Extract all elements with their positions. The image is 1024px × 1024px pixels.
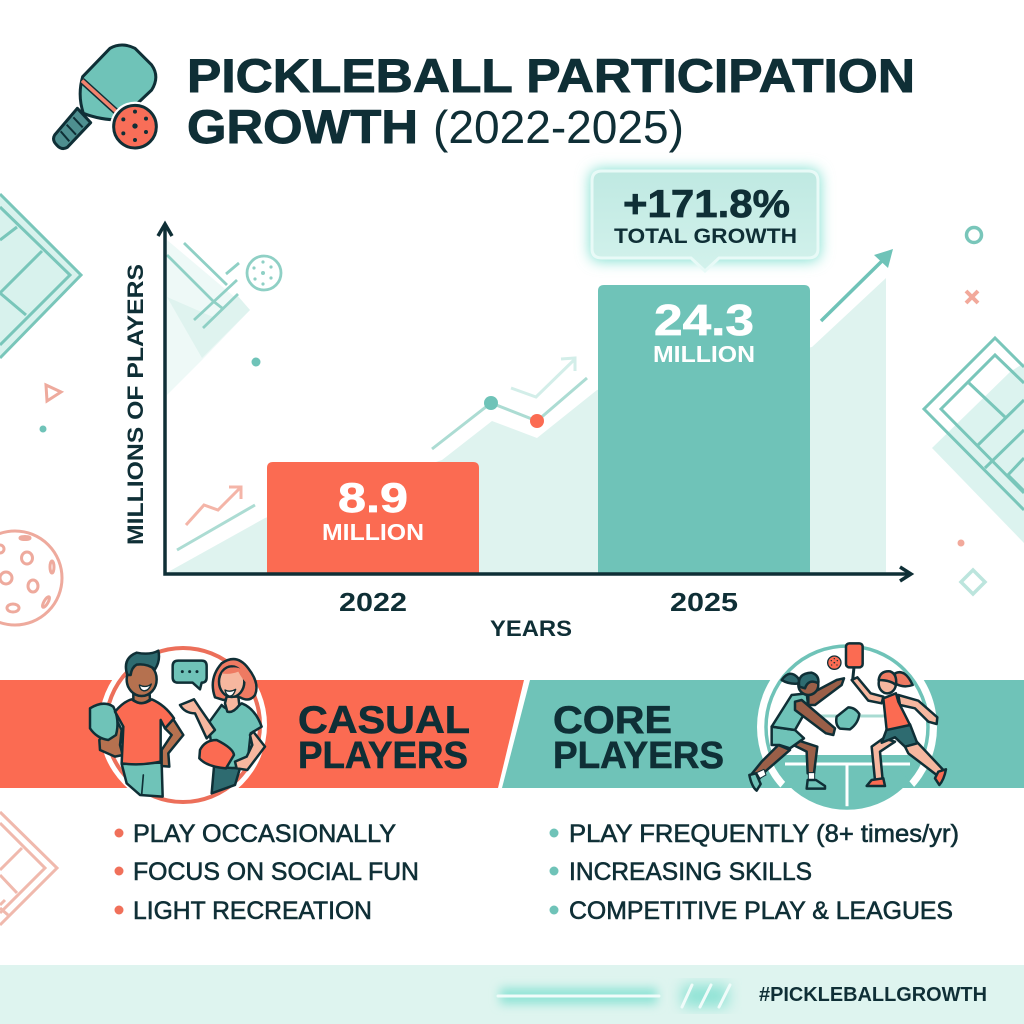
list: core player traits: COMPETITIVE PLAY & LEAGUES: [569, 897, 953, 925]
banner: core players: [502, 680, 1024, 788]
woman: pants: [212, 767, 240, 793]
illustration: core players in competitive rally: [749, 637, 946, 820]
banner: casual players: CASUAL: [298, 699, 470, 742]
list: core player traits: PLAY FREQUENTLY (8+ times/yr): [569, 820, 959, 848]
list: casual player traits: FOCUS ON SOCIAL FUN: [133, 858, 419, 886]
right player: head and ponytail: [895, 672, 913, 686]
decoration: lower left coral court: [0, 812, 57, 925]
left player: head and ponytail: [782, 674, 800, 684]
x axis title: YEARS: [490, 616, 572, 641]
left player: top: [772, 693, 808, 730]
bar: 2025: MILLION: [653, 341, 755, 367]
bar: 2022: MILLION: [322, 519, 424, 545]
illustration: casual players chatting: [90, 641, 267, 809]
callout: total growth: [590, 169, 820, 271]
left player: paddle: [836, 707, 859, 729]
ball: [828, 656, 841, 669]
decoration: right cross: [966, 291, 978, 303]
callout: total growth: TOTAL GROWTH: [614, 225, 797, 248]
decoration: right coral dot: [958, 540, 964, 546]
speech bubble: [173, 661, 207, 689]
x axis label 2025: 2025: [670, 587, 738, 617]
woman: lower arm: [235, 732, 265, 770]
man: near arm: [162, 719, 183, 767]
list: casual player traits: PLAY OCCASIONALLY: [133, 820, 396, 848]
banner: core players: CORE: [553, 699, 672, 742]
decoration: left triangle: [46, 385, 61, 401]
title: [187, 49, 915, 153]
title: (2022-2025): [433, 101, 684, 153]
woman: raised arm and hand: [180, 699, 215, 738]
right player: arms: [852, 677, 883, 703]
decoration: right diamond: [961, 570, 985, 594]
y axis label: MILLIONS OF PLAYERS: [123, 264, 148, 545]
right player: legs: [872, 738, 895, 780]
right player: shorts: [882, 724, 917, 747]
left player: legs: [752, 745, 790, 780]
icon: pickleball paddle and ball: [54, 45, 160, 152]
left player: shorts: [772, 727, 804, 748]
woman: paddle: [199, 740, 234, 768]
arrow: growth arrow next to 2025 bar: [821, 249, 893, 321]
decoration: right court: [924, 338, 1024, 543]
woman: hair back: [213, 659, 256, 700]
chart background: rising light area: [167, 240, 886, 574]
chart decoration: small rising arrows: [177, 487, 255, 550]
banner: casual players: PLAYERS: [298, 735, 468, 777]
x axis label 2022: 2022: [339, 587, 407, 617]
list: core player traits: [550, 820, 959, 925]
bar: 2022: 8.9: [338, 474, 408, 521]
footer band: [0, 965, 1024, 1024]
footer band: #PICKLEBALLGROWTH: [759, 984, 987, 1006]
bar: 2025: [598, 285, 810, 574]
list: casual player traits: [114, 820, 419, 925]
bar: 2025: 24.3: [654, 296, 754, 345]
man: neck and head: [133, 690, 150, 703]
chart decoration: trend line with dots: [432, 358, 587, 449]
right player: top: [883, 693, 910, 730]
title: GROWTH: [187, 100, 418, 153]
chart axes: [158, 224, 911, 581]
banner: casual players: [0, 680, 524, 788]
man: far arm: [99, 720, 123, 757]
man: shirt: [115, 699, 174, 764]
left player: arms: [808, 678, 844, 705]
chart decoration: teal dot: [252, 358, 260, 366]
decoration: right ring: [966, 228, 982, 242]
title: PICKLEBALL PARTICIPATION: [187, 49, 915, 102]
decoration: left tennis-style court: [0, 194, 81, 358]
decoration: left perforated ball outline: [0, 531, 62, 625]
callout: total growth: +171.8%: [623, 183, 790, 226]
list: core player traits: INCREASING SKILLS: [569, 858, 812, 886]
bar: 2022: [267, 462, 479, 574]
man: paddle: [90, 704, 117, 740]
man: legs: [122, 763, 163, 797]
list: casual player traits: LIGHT RECREATION: [133, 897, 372, 925]
woman: shirt: [208, 703, 262, 768]
chart decoration: net lines and ball: [167, 243, 281, 328]
banner: core players: PLAYERS: [553, 735, 724, 777]
decoration: left dot: [40, 426, 46, 432]
woman: face: [219, 666, 244, 697]
right player: paddle: [853, 667, 854, 680]
